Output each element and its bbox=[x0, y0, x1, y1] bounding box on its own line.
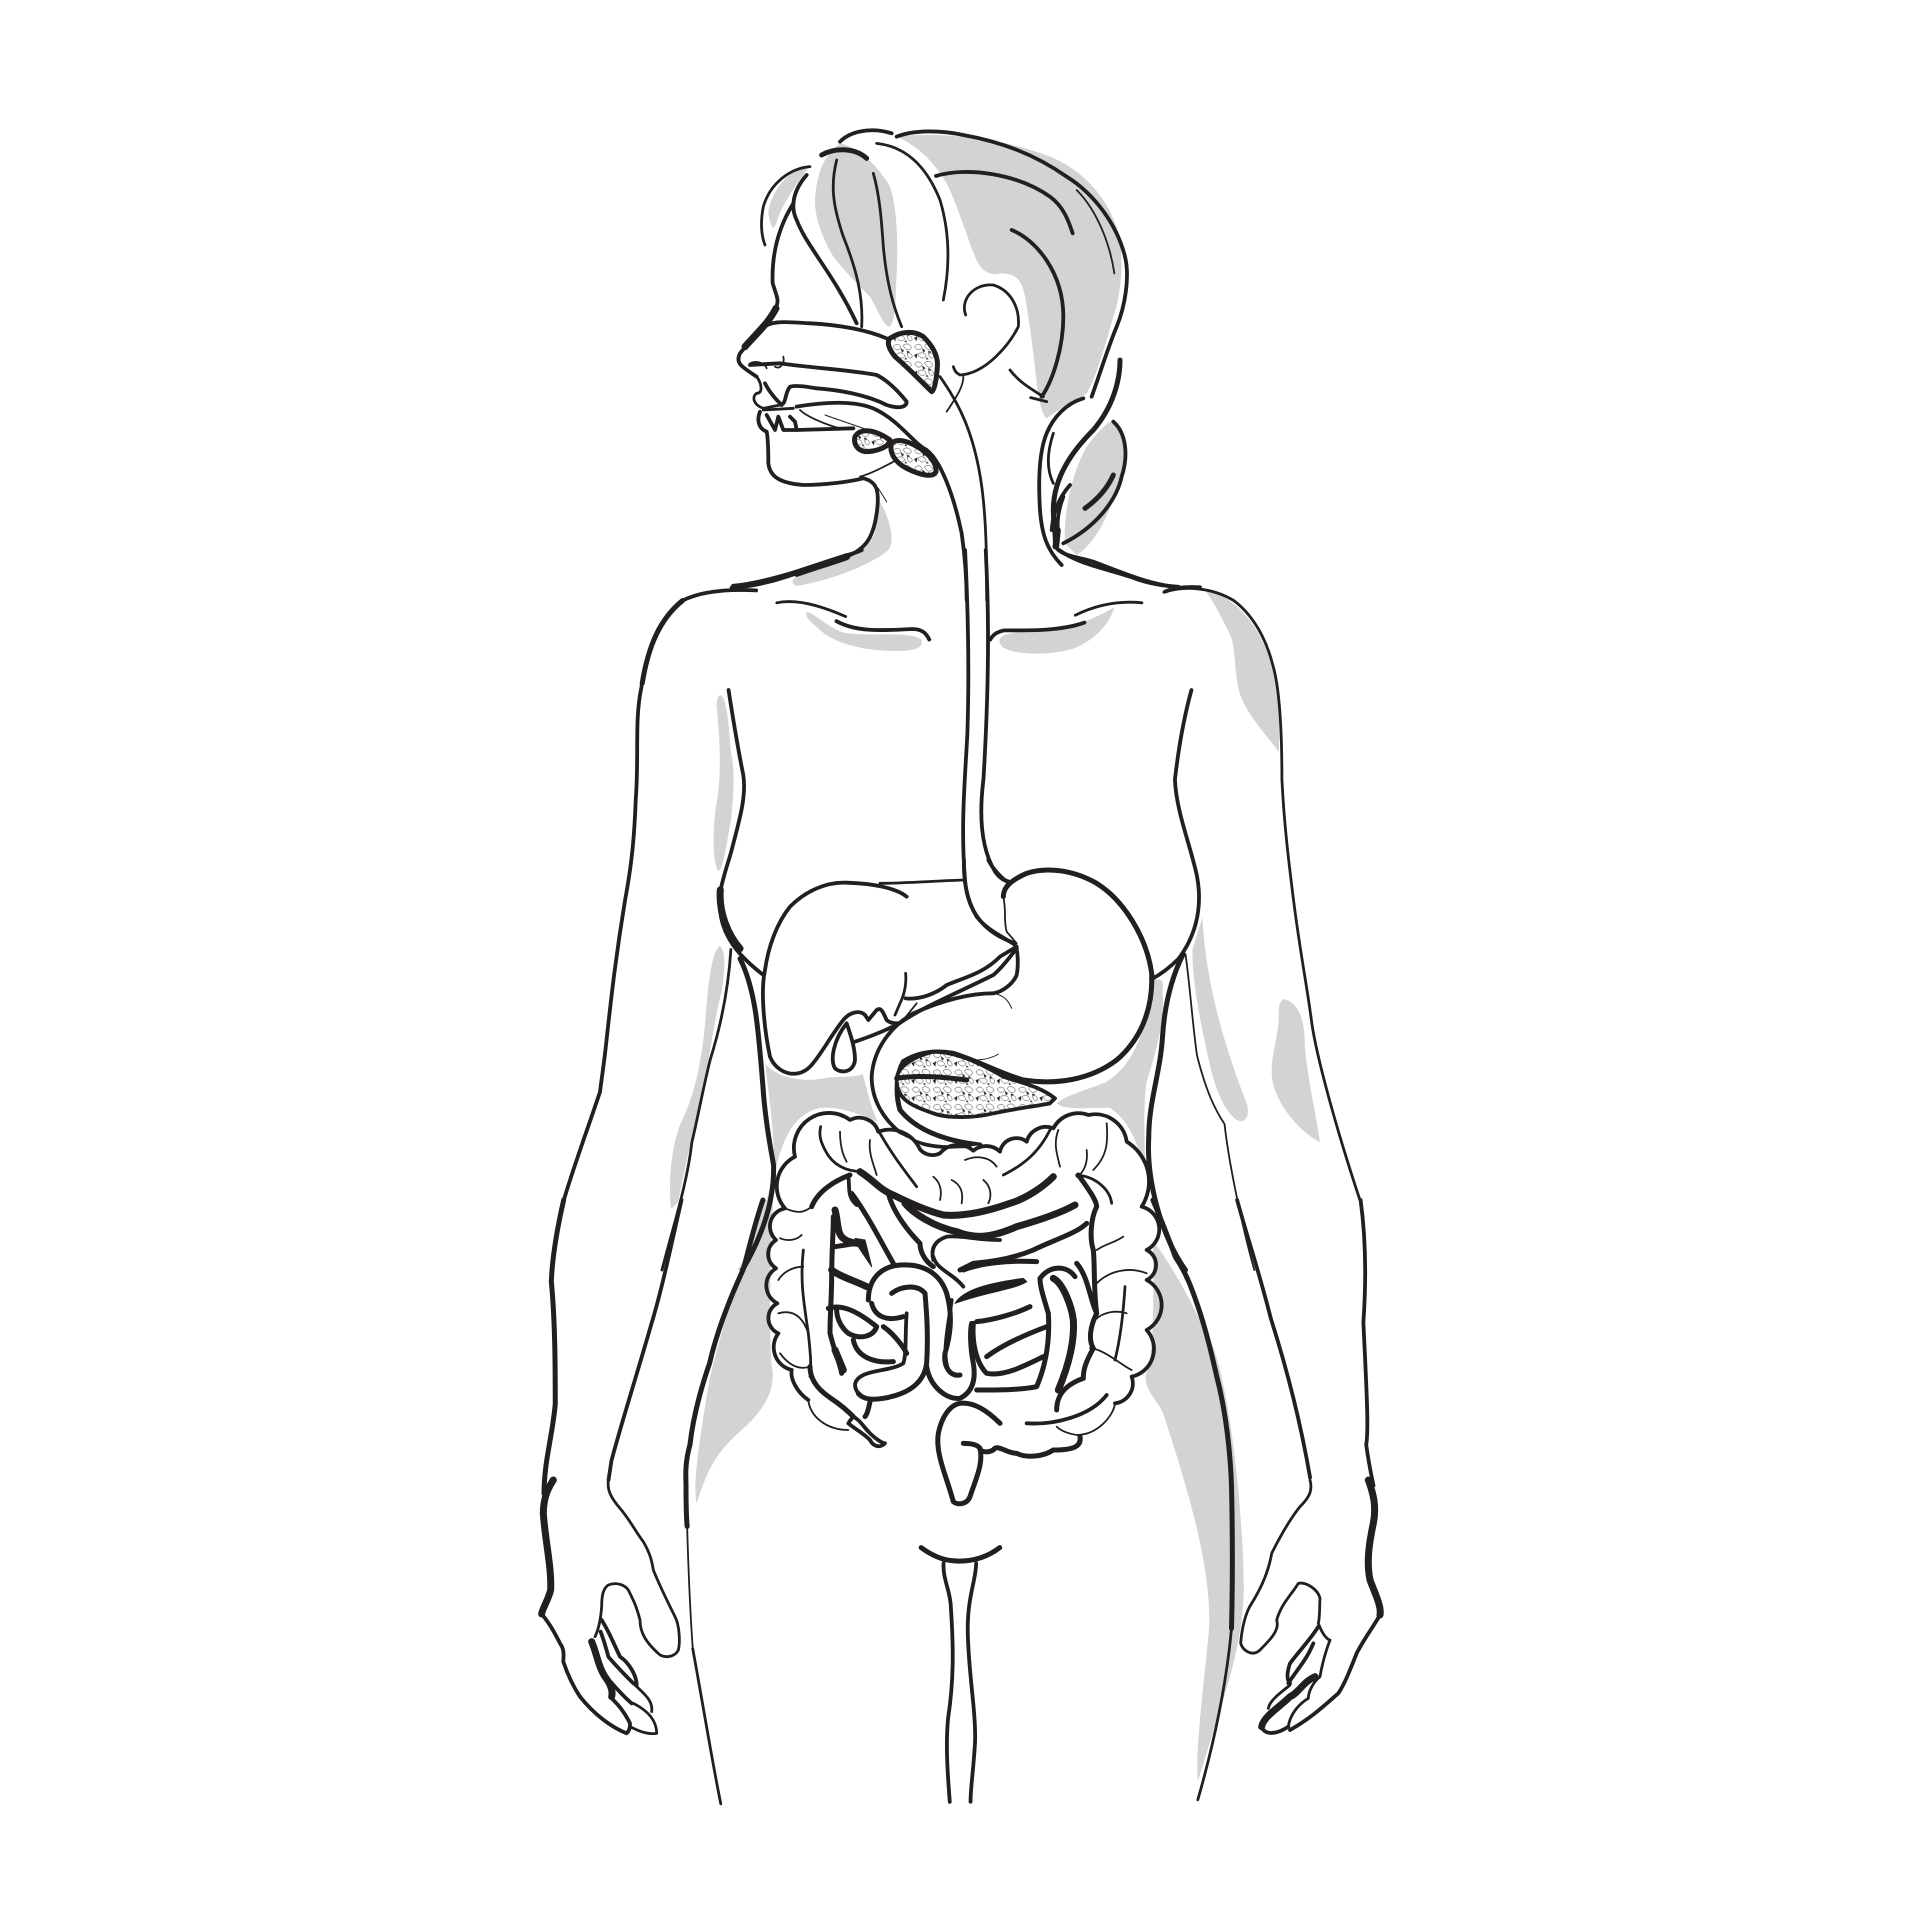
ponytail bbox=[1039, 360, 1200, 592]
small intestine loops bbox=[828, 1177, 1097, 1399]
left waist and thigh bbox=[686, 1200, 763, 1804]
colon folds bbox=[778, 1123, 1147, 1370]
torso outline: shoulders, chest, arms and esophagus bbox=[563, 550, 1360, 1270]
gray shading of the torso and arms bbox=[670, 589, 1320, 1270]
inner thigh, right bbox=[968, 1563, 976, 1802]
right arm inner edge bbox=[1237, 1200, 1310, 1477]
collar and shoulder, viewer's right bbox=[1059, 550, 1360, 1200]
head: face, hair, mouth cavity and salivary glands bbox=[732, 130, 1200, 600]
gallbladder and bile duct bbox=[833, 948, 1017, 1071]
intestine silhouette bbox=[775, 1115, 1149, 1502]
nasal and oral cavity bbox=[750, 357, 987, 600]
sublingual salivary gland bbox=[855, 431, 890, 452]
left arm inner edge bbox=[609, 1200, 682, 1480]
left hand bbox=[542, 1480, 679, 1734]
face profile and jaw bbox=[732, 203, 897, 588]
liver bbox=[763, 880, 1017, 1074]
submandibular salivary gland bbox=[891, 441, 936, 475]
right chest and waist bbox=[1148, 690, 1254, 1270]
left chest and waist bbox=[662, 690, 774, 1270]
hair outlines bbox=[762, 130, 1127, 402]
hair shading bbox=[768, 135, 1125, 586]
left arm outer edge bbox=[544, 1200, 564, 1494]
inner thigh, left bbox=[944, 1563, 953, 1802]
liver, gallbladder, stomach and pancreas bbox=[763, 860, 1152, 1147]
crotch bbox=[921, 1548, 1000, 1561]
lower body: waist, arms, legs bbox=[544, 1200, 1373, 1804]
collar and shoulder, viewer's left bbox=[563, 550, 862, 1202]
parotid salivary gland bbox=[888, 332, 937, 392]
ear bbox=[947, 285, 1019, 412]
right hand bbox=[1241, 1480, 1380, 1733]
clavicle lines bbox=[777, 602, 1142, 640]
pancreas bbox=[897, 1052, 1055, 1117]
esophagus bbox=[963, 550, 1013, 943]
large intestine outline bbox=[766, 1113, 1162, 1504]
large and small intestine bbox=[766, 1113, 1162, 1504]
right waist and thigh bbox=[1153, 1200, 1232, 1800]
stomach bbox=[872, 860, 1152, 1147]
right arm outer edge bbox=[1361, 1200, 1373, 1486]
gray shading of the hips bbox=[695, 1200, 1244, 1781]
